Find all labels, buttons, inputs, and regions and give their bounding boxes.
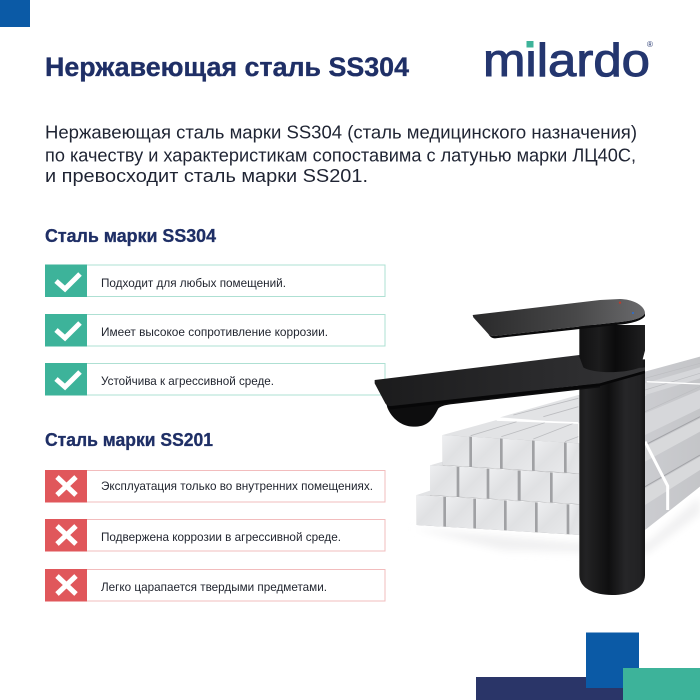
row: high corrosion resistance [45,314,385,346]
hot indicator [619,301,621,304]
faucet body [579,359,645,595]
row: prone to corrosion: Подвержена коррозии в агрессивной среде. [101,530,341,544]
panel: SS201 drawbacks [45,470,385,602]
row: resistant to aggressive environment: Устойчива к агрессивной среде. [101,374,274,388]
row: scratches easily [45,569,385,602]
faucet handle [473,299,645,336]
row: scratches easily: Легко царапается твердыми предметами. [101,580,327,594]
panel: SS304 advantages [45,264,385,396]
row: indoor use only: Эксплуатация только во внутренних помещениях. [101,479,373,493]
heading: SS201: Сталь марки SS201 [45,430,213,450]
row: suitable for any rooms: Подходит для любых помещений. [101,276,286,290]
cold indicator [632,312,634,314]
row: indoor use only [45,470,385,502]
intro text: Нержавеющая сталь марки SS304 (сталь медицинского назначения) [45,122,637,142]
intro text: по качеству и характеристикам сопоставима с латунью марки ЛЦ40С, [45,144,636,166]
bar ends [417,435,580,535]
intro text: и превосходит сталь марки SS201. [45,165,368,186]
title: Нержавеющая сталь SS304 [45,52,409,82]
illustration: black faucet [375,299,645,595]
intro text [45,122,637,186]
illustration: stack of steel bars [413,357,700,553]
row: high corrosion resistance: Имеет высокое сопротивление коррозии. [101,325,328,339]
row: prone to corrosion [45,519,385,552]
faucet neck [579,325,645,372]
row: resistant to aggressive environment [45,363,385,396]
faucet spout [387,383,600,427]
logo: milardo: ® [647,40,653,49]
row: suitable for any rooms [45,264,385,297]
decorative blocks [476,632,700,700]
spout plate [375,355,645,406]
logo: milardo: milardo [483,34,650,86]
heading: SS304: Сталь марки SS304 [45,226,216,246]
corner square [0,0,30,27]
